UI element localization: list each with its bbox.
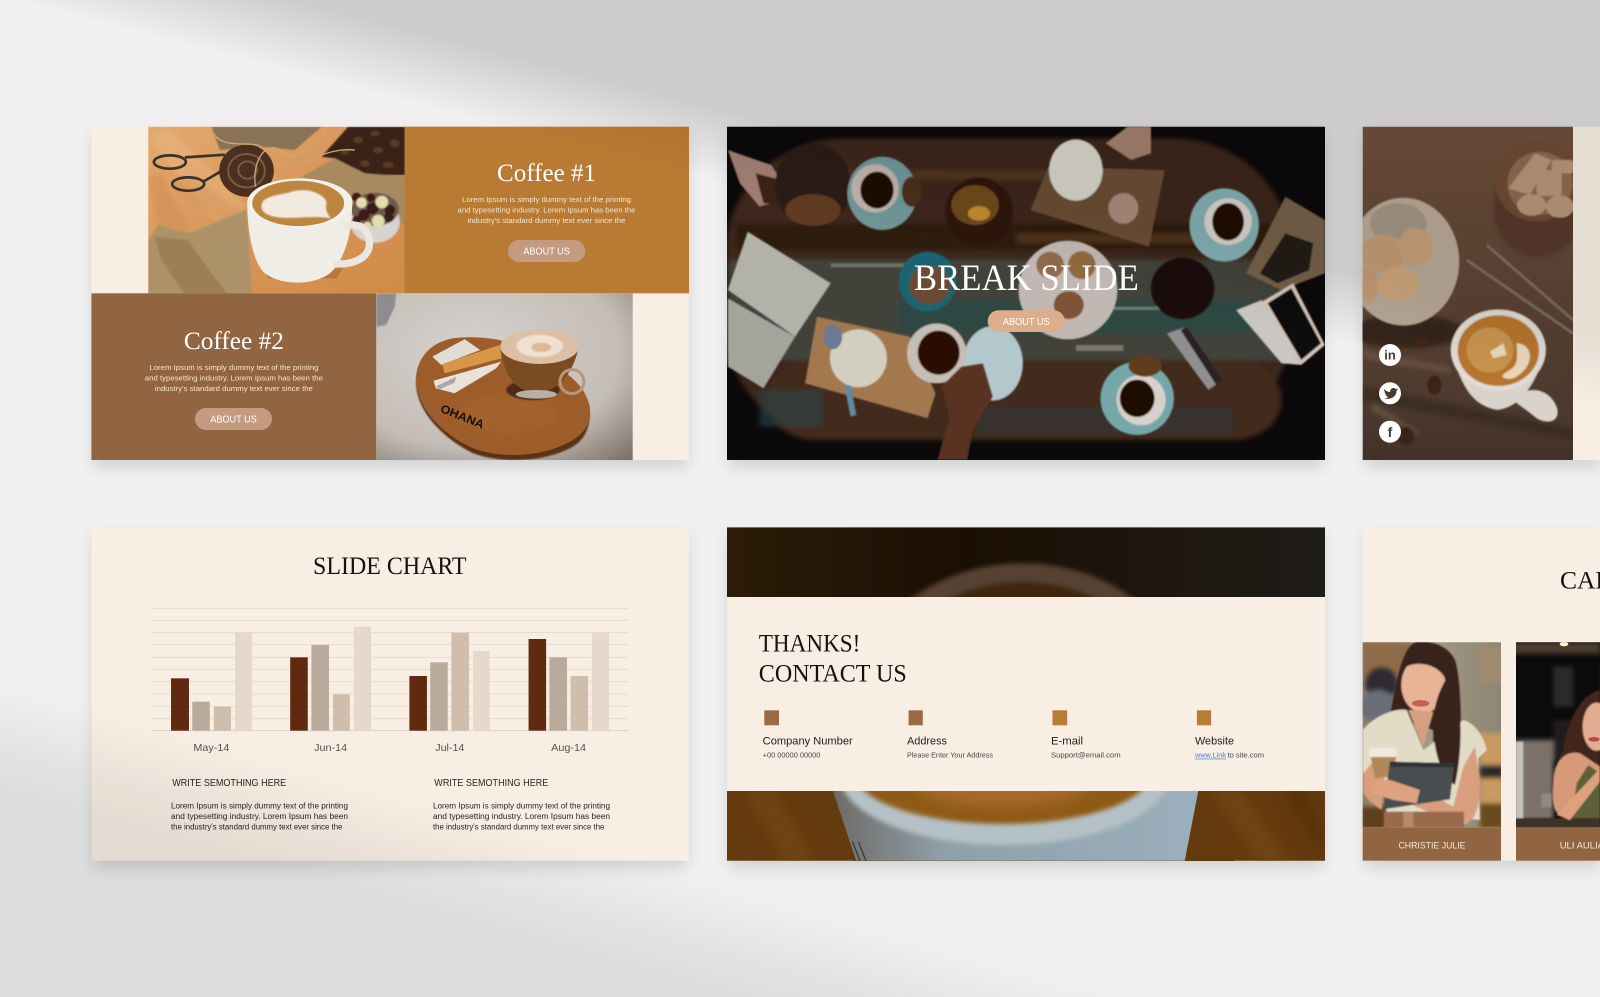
button: about us: ABOUT US — [1003, 317, 1050, 328]
button: about us: ABOUT US — [523, 247, 570, 258]
heading: coffee 2: Coffee #2 — [184, 326, 284, 355]
panel: coffee products slide — [91, 127, 689, 461]
text block right — [433, 778, 610, 831]
heading: slide chart: SLIDE CHART — [313, 553, 467, 580]
heading: thanks contact us: CONTACT US — [759, 659, 907, 688]
contact: company number — [763, 710, 853, 760]
text: coffee 1 description: industry's standard dummy text ever since the — [468, 216, 626, 225]
photo: coffee cup bottom — [727, 791, 1325, 861]
contact: address: Please Enter Your Address — [907, 753, 994, 760]
icon: facebook — [1379, 421, 1401, 443]
contact: company number: Company Number — [763, 736, 853, 748]
text block left — [171, 778, 348, 831]
panel: contact slide — [726, 527, 1327, 862]
bars: aug — [529, 632, 609, 731]
axis labels: Aug-14 — [551, 742, 586, 754]
axis labels: Jul-14 — [435, 742, 464, 754]
axis labels: Jun-14 — [314, 742, 347, 754]
photo: christie julie — [1360, 640, 1503, 830]
contact: address — [907, 710, 994, 760]
text: coffee 2 description: and typesetting industry. Lorem Ipsum has been the — [145, 373, 323, 382]
button: about us — [508, 240, 585, 262]
bars: jul — [409, 633, 490, 731]
card: christie julie — [1360, 640, 1503, 861]
text: coffee 1 description: Lorem Ipsum is simply dummy text of the printing — [462, 195, 631, 204]
contact: e-mail: Support@email.com — [1051, 753, 1121, 760]
text block right: WRITE SEMOTHING HERE — [434, 778, 549, 789]
panel: social slide — [1347, 125, 1600, 462]
icon: twitter — [1379, 382, 1401, 404]
axis labels — [193, 742, 586, 754]
card: coffee 2 — [91, 293, 376, 460]
icon: linkedin — [1379, 344, 1401, 366]
bars: jun — [290, 627, 371, 731]
name: christie julie: CHRISTIE JULIE — [1398, 841, 1466, 852]
name bar — [1516, 827, 1600, 861]
heading: coffee 1: Coffee #1 — [497, 158, 596, 187]
text block left: Lorem Ipsum is simply dummy text of the printing — [171, 802, 348, 810]
contact: website: Website — [1195, 736, 1234, 748]
text: coffee 1 description: and typesetting industry. Lorem Ipsum has been the — [458, 205, 636, 214]
photo: coffee cup top — [727, 527, 1325, 597]
panel: team slide — [1360, 527, 1600, 861]
shadow overlay on top row — [91, 127, 1600, 460]
panel shadows — [93, 134, 1600, 868]
text block right: the industry's standard dummy text ever since the — [433, 822, 605, 831]
card: uli aulia — [1513, 640, 1600, 861]
photo: coffee on wooden board — [376, 293, 634, 461]
text block right: and typesetting industry. Lorem Ipsum has been — [433, 812, 610, 821]
icon: facebook: f — [1388, 424, 1393, 440]
button: about us — [195, 408, 272, 430]
text block left: WRITE SEMOTHING HERE — [172, 778, 286, 789]
name bar — [1363, 827, 1501, 861]
contact: address: Address — [907, 736, 947, 748]
contact: website: www.Link — [1194, 753, 1227, 760]
panel: slide chart — [91, 527, 689, 861]
panel: break slide — [720, 123, 1337, 463]
heading: thanks contact us — [759, 629, 907, 688]
text: coffee 2 description — [145, 363, 323, 393]
icon: linkedin: in — [1384, 348, 1396, 362]
heading: thanks contact us: THANKS! — [759, 629, 860, 658]
contact band — [727, 597, 1325, 791]
contact: e-mail — [1051, 710, 1121, 760]
text block right: Lorem Ipsum is simply dummy text of the printing — [433, 802, 610, 810]
button: about us — [988, 310, 1065, 332]
bar chart — [152, 608, 629, 731]
text: coffee 2 description: Lorem Ipsum is simply dummy text of the printing — [149, 363, 318, 372]
contact: company number: +00 00000 00000 — [763, 753, 821, 760]
button: about us: ABOUT US — [210, 415, 257, 426]
bars: may — [171, 632, 252, 731]
text: coffee 1 description — [458, 195, 636, 225]
text block left: the industry's standard dummy text ever since the — [171, 822, 343, 831]
photo: cup and cookies — [1362, 126, 1573, 460]
photo: latte on burlap — [148, 127, 406, 295]
contact: e-mail: E-mail — [1051, 736, 1083, 748]
contact: website: to site.com — [1228, 753, 1264, 760]
axis labels: May-14 — [193, 742, 230, 754]
text block left: and typesetting industry. Lorem Ipsum has been — [171, 812, 348, 821]
logo: ohana engraving: OHANA — [439, 402, 487, 432]
contact: website — [1194, 710, 1264, 760]
heading: break slide: BREAK SLIDE — [914, 258, 1139, 299]
text: coffee 2 description: industry's standard dummy text ever since the — [155, 384, 313, 393]
photo: uli aulia — [1513, 640, 1600, 830]
card: coffee 1 — [404, 127, 689, 293]
photo: top-down coffee table — [720, 123, 1337, 463]
